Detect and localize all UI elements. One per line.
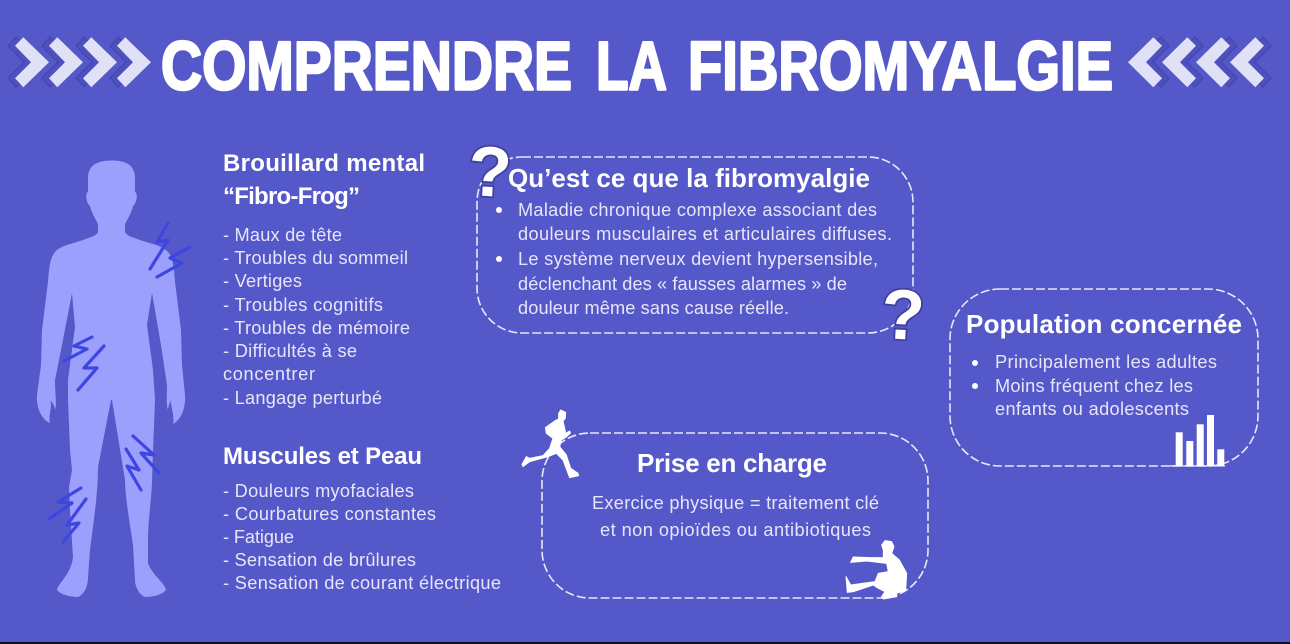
symptom list: brouillard mental: - Vertiges (223, 271, 302, 291)
symptom list: brouillard mental: - Troubles cognitifs (223, 295, 383, 315)
symptom list: brouillard mental: - Troubles du sommeil (223, 248, 408, 268)
bullets: population: Principalement les adultes (995, 352, 1217, 372)
symptom list: muscules et peau: - Sensation de courant électrique (223, 573, 501, 593)
title (161, 27, 1113, 104)
symptom list: muscules et peau (223, 481, 501, 593)
heading: muscules et peau: Muscules et Peau (223, 443, 422, 470)
icon: right chevrons (1128, 37, 1271, 87)
heading: prise en charge: Prise en charge (637, 448, 827, 478)
text block: brouillard mental (223, 150, 425, 408)
panel: population concernée (950, 289, 1258, 466)
symptom list: muscules et peau: - Sensation de brûlures (223, 550, 416, 570)
text: treatment (592, 493, 879, 540)
bullets: definition: douleur même sans cause réelle. (518, 298, 789, 318)
icon: question mark bottom: ? (879, 275, 927, 356)
symptom list: brouillard mental: - Troubles de mémoire (223, 318, 410, 338)
symptom list: brouillard mental: concentrer (223, 364, 315, 384)
symptom list: muscules et peau: - Courbatures constantes (223, 504, 436, 524)
bullets: population: enfants ou adolescents (995, 399, 1189, 419)
symptom list: muscules et peau: - Douleurs myofaciales (223, 481, 414, 501)
icon: bar chart (1170, 415, 1225, 466)
bullets: definition: Le système nerveux devient hypersensible, (518, 249, 878, 269)
icon: left chevrons (8, 37, 151, 87)
symptom list: muscules et peau: - Fatigue (223, 527, 294, 547)
bullets: population: Moins fréquent chez les (995, 376, 1193, 396)
icon: runner (522, 410, 579, 478)
bullets: definition: déclenchant des « fausses alarmes » de (518, 274, 847, 294)
icon: pain bolts (49, 223, 190, 542)
symptom list: brouillard mental (223, 225, 410, 408)
title: COMPRENDRE (161, 27, 572, 104)
icon: sitting exercise figure (846, 541, 907, 599)
bullets: definition: douleurs musculaires et articulaires diffuses. (518, 224, 892, 244)
text: treatment: Exercice physique = traitement clé (592, 493, 879, 513)
heading: brouillard mental (223, 150, 425, 210)
bullets: definition: Maladie chronique complexe associant des (518, 200, 877, 220)
symptom list: brouillard mental: - Maux de tête (223, 225, 342, 245)
text block: muscules et peau (223, 443, 501, 593)
heading: brouillard mental: Brouillard mental (223, 150, 425, 177)
panel: qu'est ce que la fibromyalgie (466, 132, 927, 356)
symptom list: brouillard mental: - Difficultés à se (223, 341, 357, 361)
symptom list: brouillard mental: - Langage perturbé (223, 388, 382, 408)
panel: prise en charge (522, 410, 928, 599)
icon: question mark top: ? (466, 132, 514, 213)
title: FIBROMYALGIE (688, 27, 1113, 104)
heading: population concernée: Population concernée (966, 309, 1242, 339)
icon: human body silhouette (37, 160, 190, 597)
bullets: population (972, 352, 1217, 419)
heading: definition: Qu’est ce que la fibromyalgie (508, 163, 870, 193)
bullets: definition (496, 200, 892, 318)
heading: brouillard mental: “Fibro-Frog” (223, 183, 360, 210)
title: LA (596, 27, 667, 104)
text: treatment: et non opioïdes ou antibiotiques (600, 520, 871, 540)
